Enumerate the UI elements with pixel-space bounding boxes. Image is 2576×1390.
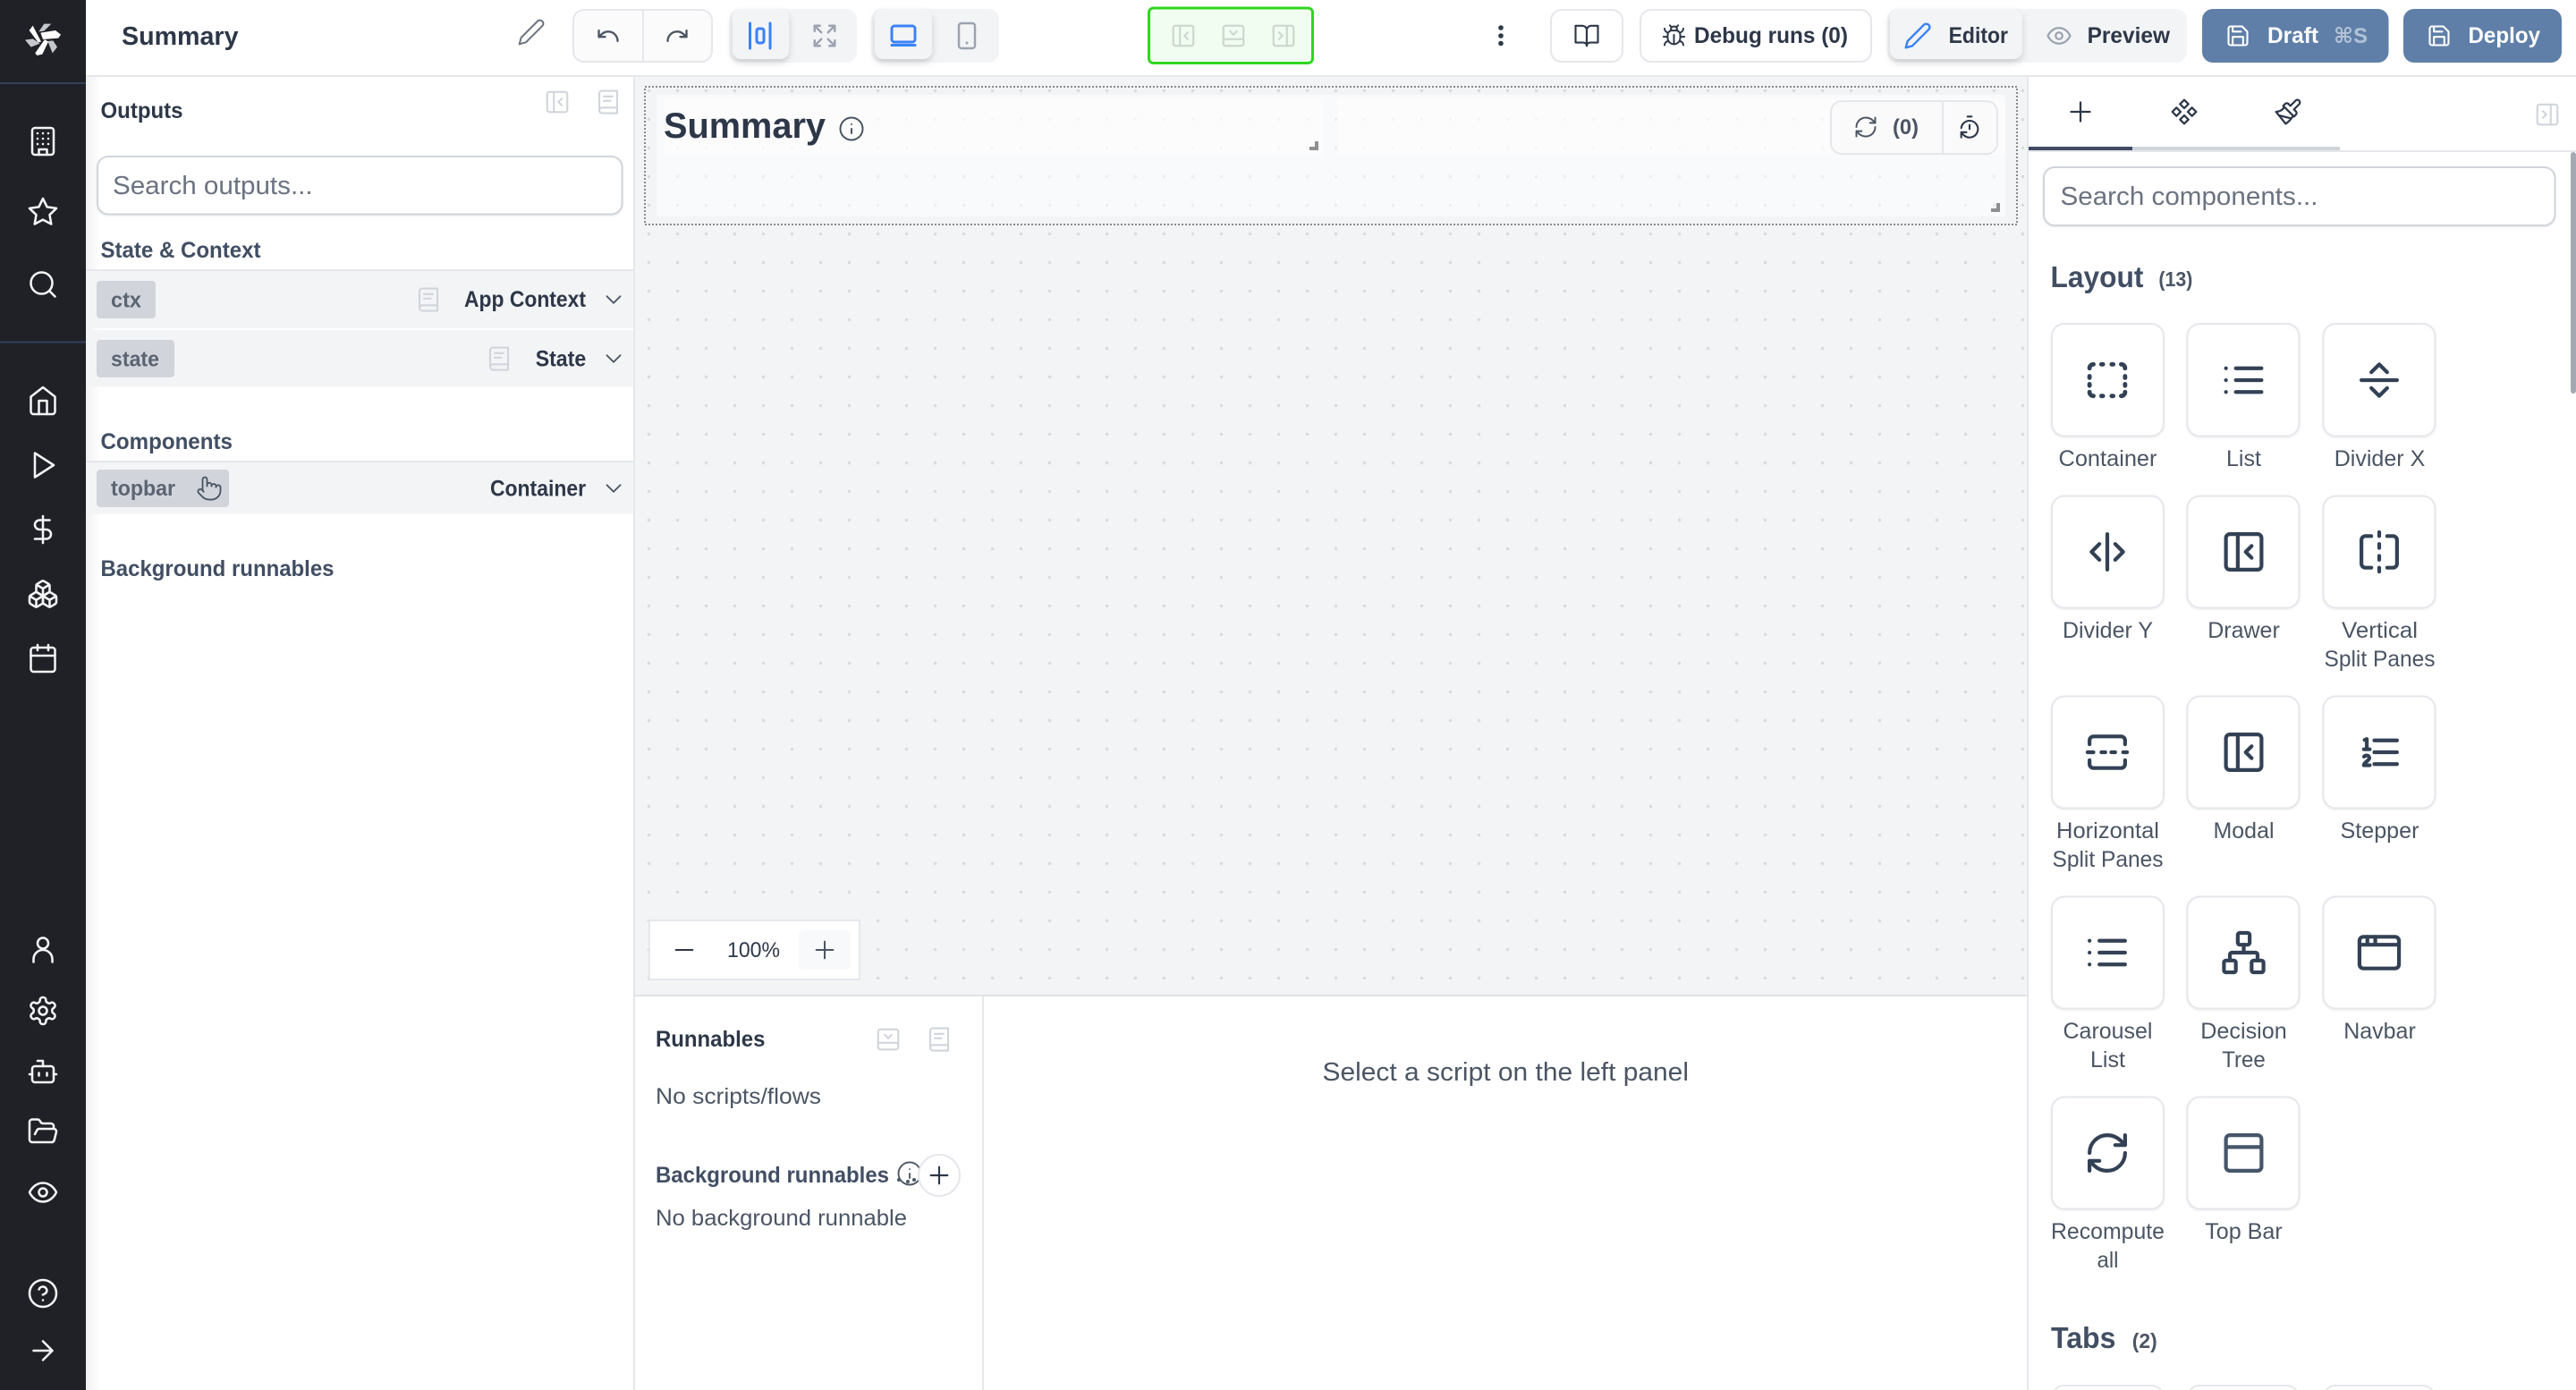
panel: left navigation sidebar [0,0,100,1390]
search outputs input [97,157,623,215]
zoom control: 100% [727,938,780,962]
row: topbar: Container [490,476,586,501]
icons: panel and docs [878,1029,948,1050]
card: carousel list: List [2090,1047,2125,1072]
button: draft: ⌘S [2334,24,2368,48]
card: recompute all: Recompute [2051,1219,2165,1244]
icon: edit pencil [520,21,543,44]
row: topbar [86,461,633,513]
card: top bar [2188,1097,2299,1244]
icon: info with loading dots [897,1163,921,1184]
card: drawer: Drawer [2207,618,2280,643]
card: divider y: Divider Y [2063,618,2153,643]
zoom control [649,920,860,979]
undo and redo buttons [573,10,712,62]
panel: outputs [86,77,635,1390]
panel: top toolbar [86,0,2576,77]
icons: panel and docs [547,91,617,113]
text: select a script: Select a script on the left panel [1322,1058,1689,1087]
button: draft [2202,9,2388,63]
toggle: editor and preview: Editor [1949,23,2008,48]
icon: windmill logo [25,24,61,55]
icon: more menu dots [1498,25,1504,46]
cards: tabs row (clipped) [2052,1386,2435,1390]
recompute control: (0) [1893,115,1919,140]
row: state [86,330,633,386]
sidebar icons [30,128,56,1360]
heading: background runnables: Background runnables [100,556,335,581]
card: decision tree [2188,896,2299,1072]
card: horizontal split panes: Split Panes [2052,847,2163,872]
card: recompute all [2051,1097,2165,1273]
row: topbar: topbar [111,477,175,501]
tabs [2029,100,2576,152]
heading: layout [2050,260,2192,293]
search components input: Search components... [2061,182,2318,211]
heading: app name: Summary [122,22,238,51]
button: documentation [1551,10,1623,62]
heading: background runnables: Background runnables [656,1163,889,1188]
card: navbar [2324,896,2435,1044]
card: horizontal split panes [2052,696,2164,872]
card: container [2052,324,2164,471]
card: drawer [2188,496,2299,643]
panel toggles highlighted in green [1148,8,1313,63]
card: vertical split panes [2324,496,2435,672]
scrollbar [2571,152,2576,394]
button: deploy [2403,9,2562,63]
card: list [2188,324,2299,471]
card: vertical split panes: Split Panes [2324,647,2435,672]
card: modal [2188,696,2299,843]
card: stepper: Stepper [2340,818,2419,843]
button: debug runs: Debug runs (0) [1694,23,1848,48]
heading: tabs: Tabs [2051,1321,2116,1354]
card: divider x: Divider X [2334,446,2426,471]
row: state: state [111,347,159,372]
card: navbar: Navbar [2343,1019,2416,1044]
panel: summary top bar container [645,87,2017,225]
icon: info [841,118,862,140]
heading: layout: Layout [2050,260,2144,293]
toggle: device mode [871,9,999,63]
text: no scripts: No scripts/flows [656,1084,821,1109]
button: debug runs [1640,10,1871,62]
heading: state and context: State & Context [100,238,261,263]
button: add background runnable [919,1155,960,1196]
card: horizontal split panes: Horizontal [2056,818,2159,843]
heading: layout: (13) [2158,267,2192,291]
card: modal: Modal [2213,818,2274,843]
card: decision tree: Decision [2200,1019,2287,1044]
card: divider y [2052,496,2164,643]
card: carousel list [2052,896,2164,1072]
toggle: editor and preview: Preview [2088,23,2171,48]
heading: components: Components [100,429,233,454]
card: recompute all: all [2097,1248,2118,1273]
heading: outputs: Outputs [100,98,182,123]
heading: runnables: Runnables [656,1027,765,1052]
heading: summary: Summary [664,106,826,146]
recompute control [1831,101,1997,154]
row: ctx [86,269,633,328]
card: decision tree: Tree [2222,1047,2266,1072]
row: state: State [536,347,586,372]
panel: component library [2027,77,2576,1390]
card: carousel list: Carousel [2063,1019,2152,1044]
heading: tabs: (2) [2132,1329,2157,1352]
card: list: List [2226,446,2261,471]
toggle: editor and preview [1887,9,2187,63]
card: stepper [2324,696,2435,843]
card: top bar: Top Bar [2205,1219,2283,1244]
search components input [2044,167,2555,225]
canvas: dotted editing grid [635,77,2027,996]
panel: runnables [633,995,2029,1390]
card: vertical split panes: Vertical [2342,618,2418,643]
card: container: Container [2059,446,2157,471]
resize handles [1309,141,2000,212]
row: ctx: ctx [111,288,142,313]
search outputs input: Search outputs... [113,172,313,200]
button: draft: Draft [2267,23,2319,48]
row: ctx: App Context [464,287,587,312]
heading: tabs [2051,1321,2157,1354]
text: no background runnable: No background runnable [656,1206,907,1231]
toggle: width mode [729,9,857,63]
card: divider x [2324,324,2435,471]
button: deploy: Deploy [2469,23,2540,48]
